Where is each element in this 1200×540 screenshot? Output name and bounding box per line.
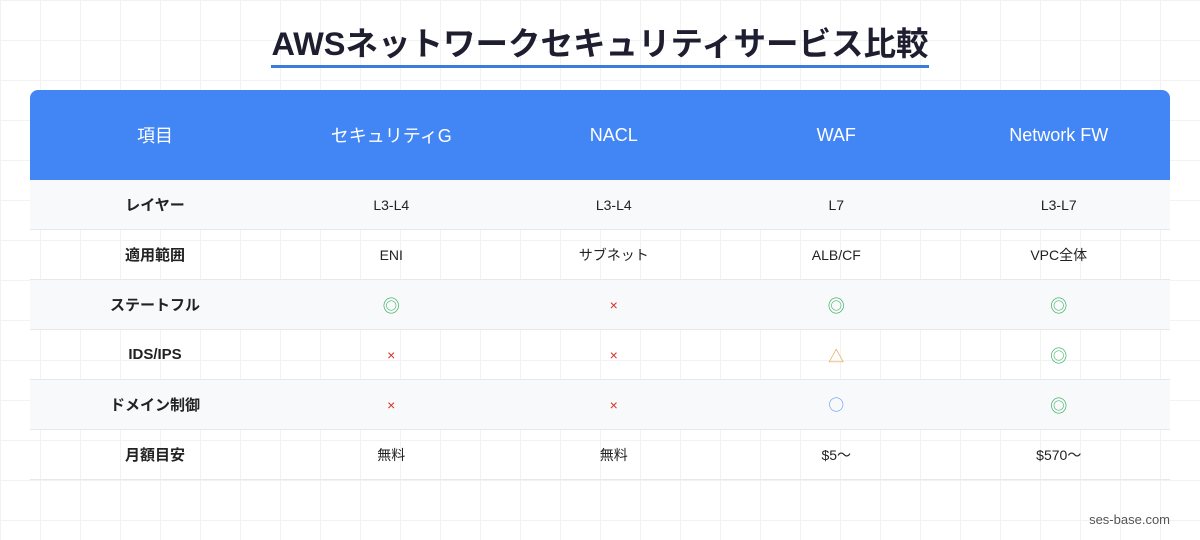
row: domain control xyxy=(30,380,1170,430)
row: IDS/IPS: × xyxy=(387,346,395,362)
footer credit: ses-base.com xyxy=(1089,512,1170,527)
header row xyxy=(30,90,1170,180)
row: monthly cost: $5〜 xyxy=(821,446,851,462)
row: stateful: × xyxy=(610,296,618,312)
row: IDS/IPS: IDS/IPS xyxy=(128,346,182,363)
comparison table xyxy=(30,90,1170,480)
header row: Network FW xyxy=(1009,124,1108,144)
row: domain control: ◯ xyxy=(829,397,844,414)
row: monthly cost: 月額目安 xyxy=(125,447,185,464)
row: IDS/IPS: ◎ xyxy=(1050,347,1067,366)
header row: WAF xyxy=(817,124,856,144)
header row: 項目 xyxy=(137,126,173,146)
row: domain control: × xyxy=(610,396,618,412)
row: monthly cost: 無料 xyxy=(377,446,405,462)
row: stateful: ◎ xyxy=(1050,297,1067,316)
row: scope: 適用範囲 xyxy=(125,247,185,264)
row: monthly cost: $570〜 xyxy=(1036,446,1081,462)
row: layer: L7 xyxy=(828,196,844,212)
row: layer: L3-L7 xyxy=(1041,196,1077,212)
row: scope xyxy=(30,230,1170,280)
row: IDS/IPS: × xyxy=(610,346,618,362)
row: layer: レイヤー xyxy=(125,197,185,214)
row: scope: VPC全体 xyxy=(1030,246,1087,262)
row: scope: ENI xyxy=(380,246,403,262)
row: domain control: ドメイン制御 xyxy=(110,397,200,414)
row: layer: L3-L4 xyxy=(596,196,632,212)
row: stateful: ◎ xyxy=(383,297,400,316)
header row: セキュリティG xyxy=(331,126,452,146)
row: stateful: ステートフル xyxy=(110,297,200,314)
row: stateful: ◎ xyxy=(828,297,845,316)
row: stateful xyxy=(30,280,1170,330)
row: IDS/IPS xyxy=(30,330,1170,380)
row: scope: ALB/CF xyxy=(812,246,861,262)
row: scope: サブネット xyxy=(579,246,649,262)
row: domain control: × xyxy=(387,396,395,412)
header row: NACL xyxy=(590,124,638,144)
row: monthly cost: 無料 xyxy=(600,446,628,462)
row: layer: L3-L4 xyxy=(373,196,409,212)
row: IDS/IPS: △ xyxy=(828,348,844,366)
row: domain control: ◎ xyxy=(1050,397,1067,416)
row: monthly cost xyxy=(30,430,1170,480)
row: layer xyxy=(30,180,1170,230)
title: AWSネットワークセキュリティサービス比較 xyxy=(271,26,929,62)
